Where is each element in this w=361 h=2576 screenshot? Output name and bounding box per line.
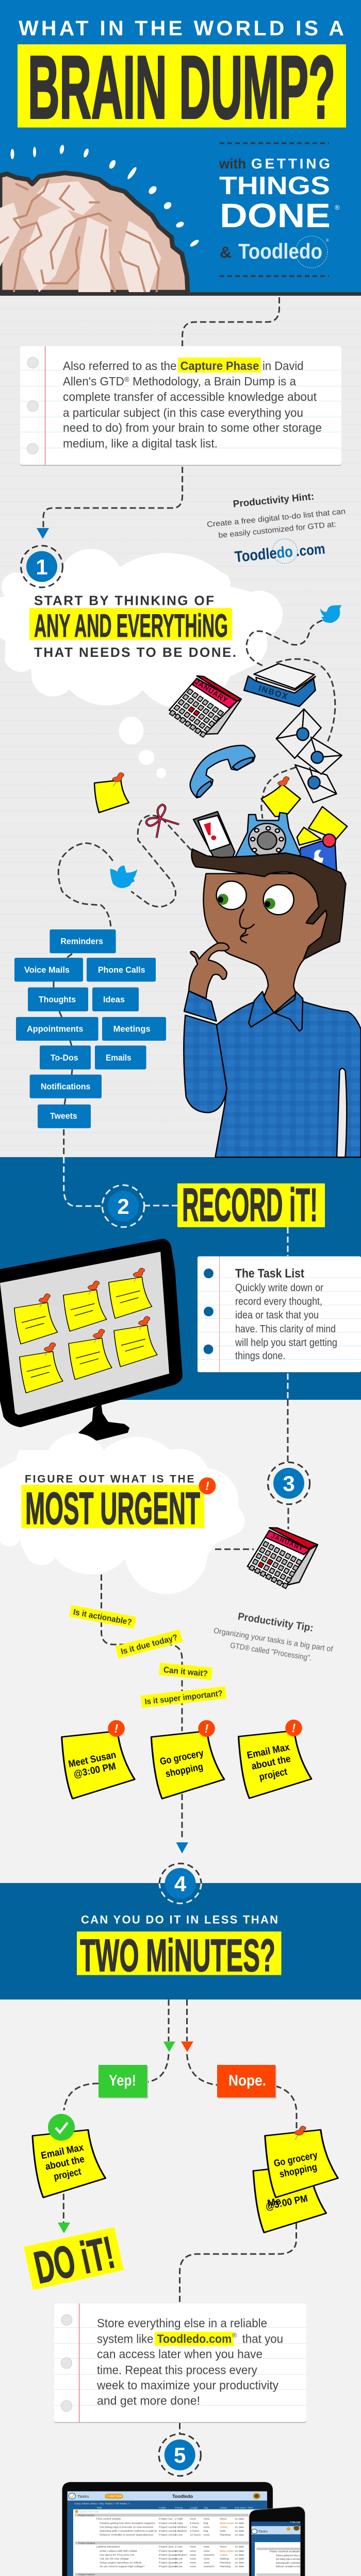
ruled paper section background — [0, 296, 361, 1157]
laptop task rows: no date — [235, 2518, 244, 2521]
laptop task rows: no date — [235, 2526, 244, 2529]
note text: meet susan: Meet Susan — [68, 1750, 117, 1770]
nose and mouth — [240, 909, 254, 943]
thought bubbles — [119, 717, 166, 778]
icon: calendar large — [168, 676, 241, 739]
laptop task rows: Get specs for XTQ-2321-HS — [100, 2554, 135, 2556]
logo lockup: with getting things done and toodledo: ® — [326, 238, 329, 243]
icon: brain — [0, 173, 188, 292]
sticky notes: stacked deferred tasks: Go grocery — [273, 2150, 319, 2170]
badge: step 1 — [21, 546, 63, 587]
store text: can access later when you have — [97, 2347, 262, 2361]
laptop task rows: Planning — [220, 2534, 231, 2537]
intro text: Methodology, a Brain Dump is a — [129, 375, 296, 388]
productivity hint: Create a free digital to-do list that can — [206, 507, 346, 529]
productivity tip: GTD® called "Processing". — [229, 1641, 313, 1663]
icon: green check — [48, 2114, 75, 2141]
intro text — [63, 359, 322, 450]
icon: twitter bird lower — [110, 866, 138, 888]
task list text: Quickly write down or — [235, 1282, 323, 1294]
laptop task rows: Waiting — [220, 2557, 229, 2561]
store text: time. Repeat this process every — [97, 2363, 257, 2377]
chip: notifications — [30, 1075, 102, 1098]
productivity tip — [213, 1611, 334, 1663]
laptop task rows: 0 Low — [175, 2546, 183, 2548]
badge: step 5: 5 — [174, 2443, 186, 2467]
laptop task rows: none — [190, 2550, 196, 2553]
laptop task rows: 2 hours — [190, 2530, 200, 2533]
text: small calendar month: JANUARY — [270, 1532, 304, 1552]
laptop task rows: Project Quasar — [159, 2557, 177, 2561]
laptop task rows: Hold — [220, 2530, 226, 2533]
note text: go grocery shopping: shopping — [165, 1761, 204, 1780]
chip: emails — [95, 1045, 146, 1070]
heading: step 1: START BY THINKING OF — [34, 592, 214, 608]
button: yep: Yep! — [109, 2072, 136, 2089]
badge: step 3: 3 — [283, 1471, 295, 1496]
note text: meet susan — [68, 1750, 117, 1780]
light section background — [0, 1400, 361, 2576]
laptop task rows: none — [204, 2562, 210, 2564]
laptop task rows: no date — [235, 2546, 244, 2548]
laptop task rows: 1 hour — [190, 2526, 198, 2529]
icon: ribbon — [146, 805, 179, 838]
badge: step 5 — [159, 2434, 201, 2476]
laptop task rows: Project Quasar — [78, 2542, 95, 2544]
laptop task rows: Selecting path A sometimes redirects to path B — [100, 2530, 157, 2533]
arrow: note to do it — [58, 2194, 70, 2233]
laptop task rows: 0 Low — [175, 2562, 183, 2564]
sticky notes: urgent tasks artwork — [62, 1731, 311, 1799]
chip: reminders — [50, 929, 116, 953]
sticky note: email max: Email Max — [40, 2142, 85, 2161]
laptop task rows: Refactor controller to remove dependencies — [100, 2534, 153, 2537]
laptop app header: Tag — [204, 2506, 208, 2509]
laptop task rows: none — [204, 2546, 210, 2548]
phone: Flow control module — [270, 2550, 300, 2553]
intro text: Allen's GTD — [63, 375, 126, 388]
chip: meetings: Meetings — [113, 1024, 151, 1034]
laptop app header: Folder — [159, 2506, 166, 2509]
laptop task rows: Packets getting lost when exception happens — [100, 2522, 155, 2525]
note text: email max — [246, 1742, 292, 1783]
logo: toodledo.com: Toodledo — [234, 543, 293, 566]
laptop task rows: no date — [235, 2534, 244, 2537]
illustration: things flying out of head — [58, 605, 361, 1157]
decision arrows — [64, 1999, 297, 2134]
chip: phone calls — [87, 958, 156, 981]
laptop task rows: bug — [204, 2522, 208, 2525]
laptop task rows: no date — [235, 2522, 244, 2525]
intro text: Also referred to as the — [63, 359, 176, 372]
arrow: cloud to calendar — [215, 1549, 254, 1550]
laptop task rows: Next Action — [220, 2522, 234, 2525]
text: inbox label: INBOX — [257, 684, 289, 701]
intro text: medium, like a digital task list. — [63, 437, 218, 450]
laptop app header: Length — [190, 2506, 198, 2509]
store text: that you — [242, 2332, 283, 2345]
laptop task rows: None — [220, 2518, 226, 2521]
logo: toodledo.com: .com — [295, 540, 326, 560]
icon: sticky note left — [94, 773, 129, 812]
laptop task rows: Project Nebula — [78, 2573, 95, 2575]
laptop task rows: none — [190, 2558, 196, 2561]
logo lockup: with getting things done and toodledo: ® — [335, 204, 340, 211]
icon: facebook card — [299, 834, 337, 872]
laptop task rows: 0 Low — [175, 2565, 183, 2568]
phone: Refactor controller to rem — [276, 2565, 300, 2568]
phone — [249, 2506, 341, 2576]
badge: step 2: 2 — [117, 1194, 129, 1218]
task list text: will help you start getting — [235, 1337, 337, 1349]
laptop task rows: no date — [235, 2557, 244, 2561]
cuff — [184, 991, 217, 1021]
laptop task rows: 2 High — [175, 2518, 183, 2521]
logo: toodledo.com — [234, 535, 326, 568]
laptop task rows: 0 Low — [175, 2534, 183, 2537]
store text: Toodledo.com — [157, 2332, 232, 2345]
task list text: have. This clarity of mind — [235, 1324, 336, 1335]
badge: step 1: 1 — [36, 555, 48, 579]
chip: ideas: Ideas — [103, 995, 125, 1005]
laptop app header: Gary Olsen (Me) > My Tasks > All Tasks > — [74, 2502, 130, 2505]
heading: two minutes — [77, 1913, 282, 1981]
phone: Packets getting lost when e — [276, 2554, 300, 2557]
logo lockup: with getting things done and toodledo: DONE — [220, 196, 331, 234]
laptop task rows: none — [204, 2550, 210, 2553]
torso — [215, 993, 361, 1157]
task list text: The Task List — [235, 1266, 304, 1280]
laptop app header: Status — [220, 2506, 227, 2509]
chip: thoughts: Thoughts — [39, 995, 76, 1005]
store text: and get more done! — [97, 2394, 200, 2407]
icon: exclamation — [199, 1478, 216, 1494]
laptop app header: + ADD TASK — [107, 2495, 122, 2498]
sticky notes: stacked deferred tasks — [253, 2126, 338, 2232]
laptop task rows: Project Aurora — [159, 2522, 176, 2525]
icon: brain rays — [10, 144, 200, 248]
productivity hint: be easily customized for GTD at: — [218, 520, 336, 540]
hair — [191, 849, 346, 959]
productivity tip: Organizing your tasks is a big part of — [213, 1626, 334, 1654]
chip: emails: Emails — [106, 1053, 132, 1062]
button: nope — [217, 2065, 276, 2098]
chip: voice mails — [14, 958, 83, 981]
text: calendar month: JANUARY — [193, 677, 229, 704]
panel: captured task chips — [14, 929, 166, 1128]
task list text: things done. — [235, 1350, 285, 1362]
arrow: cloud through questions to notes — [101, 1574, 188, 1854]
laptop task rows: none — [190, 2562, 196, 2564]
chip: to-dos: To-Dos — [51, 1053, 78, 1062]
icon: sticky notes right — [297, 807, 347, 845]
urgent badge marks: ! — [114, 1722, 119, 1735]
laptop task rows: 1 Medium — [175, 2526, 187, 2529]
heading: step 1 — [29, 592, 236, 660]
laptop task rows: Flow control module — [96, 2518, 121, 2521]
laptop task rows: Planning — [220, 2565, 231, 2568]
laptop app header: Due Date / Time — [235, 2506, 253, 2509]
laptop task rows: Project Aurora — [159, 2526, 176, 2529]
illustration: laptop and phone showing toodledo — [38, 2482, 341, 2576]
arrow head: no — [181, 2041, 193, 2052]
laptop task rows: none — [204, 2534, 210, 2537]
arrow: header to intro card — [183, 297, 280, 346]
phone: Get debug logs to truncate — [276, 2558, 300, 2561]
laptop task rows: bug — [204, 2530, 208, 2533]
icon: handset — [190, 745, 255, 798]
laptop task rows: Active — [220, 2554, 227, 2556]
collar — [249, 992, 303, 1031]
chip: meetings — [102, 1017, 166, 1041]
intro text: need to do) from your brain to some other storage — [63, 421, 322, 434]
laptop task rows: 1 Medium — [175, 2530, 187, 2533]
task list text: idea or task that you — [235, 1310, 319, 1321]
laptop task rows: none — [204, 2527, 210, 2529]
note text: go grocery shopping: Go grocery — [159, 1748, 205, 1768]
chip: notifications: Notifications — [41, 1081, 90, 1091]
phone: Tasks — [258, 2530, 268, 2533]
shirt gap — [337, 1069, 347, 1157]
urgent badge marks: ! — [205, 1722, 209, 1735]
badge: step 4 — [159, 1863, 201, 1903]
chip: tweets: Tweets — [50, 1111, 77, 1121]
chip: ideas — [92, 987, 139, 1011]
button: yep — [99, 2065, 148, 2098]
note text: email max: project — [258, 1767, 289, 1783]
laptop task rows: no date — [235, 2550, 244, 2553]
header background — [0, 0, 361, 292]
arrow head: yes — [163, 2041, 175, 2052]
laptop task rows: Order Arduino with WiFi shield — [100, 2550, 137, 2553]
laptop task rows: Project Aurora — [159, 2530, 176, 2533]
note text: email max: Email Max — [246, 1742, 291, 1761]
laptop task rows: Project Aurora — [159, 2534, 176, 2537]
laptop task rows: none — [190, 2546, 196, 2548]
laptop task rows: 2 High — [175, 2522, 183, 2525]
badge: step 4: 4 — [174, 1872, 187, 1896]
laptop task rows: None — [220, 2546, 226, 2548]
note text: email max: about the — [251, 1754, 292, 1772]
laptop task rows: no date — [235, 2562, 244, 2564]
panel: intro notebook card — [20, 346, 341, 466]
arrow: card to step 5 — [179, 2423, 180, 2434]
icon: rotary telephone — [235, 812, 301, 860]
laptop task rows: Planning — [220, 2562, 231, 2564]
intro text: a particular subject (in this case everything you — [63, 406, 303, 419]
chip: appointments — [16, 1017, 99, 1041]
band: two minutes section — [0, 1883, 361, 1999]
laptop task rows: Project Aur... — [159, 2518, 174, 2521]
productivity hint — [206, 492, 346, 568]
note text: meet susan: @3:00 PM — [73, 1761, 117, 1780]
laptop task rows: Project Quasar — [159, 2565, 177, 2568]
badge: step 3 — [268, 1462, 310, 1504]
icon: inbox tray — [244, 664, 316, 706]
intro text: complete transfer of accessible knowledge about — [63, 390, 317, 403]
laptop task rows: none — [204, 2518, 210, 2521]
task list text — [235, 1266, 337, 1362]
heading: most urgent: MOST URGENT — [25, 1483, 200, 1534]
laptop task rows: no date — [235, 2565, 244, 2568]
chip: appointments: Appointments — [27, 1024, 83, 1034]
urgent badge marks — [114, 1721, 296, 1735]
label: can it wait — [159, 1663, 212, 1680]
chip: to-dos — [40, 1045, 91, 1070]
laptop — [38, 2482, 273, 2576]
icon: exclamation: ! — [205, 1479, 209, 1493]
laptop task rows: research — [204, 2554, 215, 2556]
panel: the task list card — [198, 1256, 361, 1373]
heading: do it: DO iT! — [30, 2226, 119, 2293]
arrow: chips to step 2 — [64, 1129, 288, 1256]
laptop task rows: none — [190, 2554, 196, 2556]
logo lockup: with getting things done and toodledo: GETTING — [251, 156, 330, 172]
laptop app header: Quick Add Task — [79, 2511, 99, 2513]
laptop task rows: none — [190, 2518, 196, 2521]
label: is it super important: Is it super important? — [144, 1689, 223, 1706]
icon: cell phone — [193, 811, 235, 858]
laptop task rows: Project Aurora — [78, 2514, 94, 2516]
button: nope: Nope. — [228, 2072, 266, 2089]
laptop app header: Task — [96, 2506, 102, 2509]
face and neck — [204, 874, 336, 1013]
note text: go grocery shopping — [159, 1748, 205, 1780]
laptop task rows: Active — [220, 2526, 227, 2529]
heading: do it — [23, 2225, 125, 2295]
phone: Selecting path A sometime — [276, 2562, 300, 2565]
cloud: step 1 heading — [0, 549, 283, 708]
icon: twitter bird top — [320, 605, 341, 623]
laptop app header: Toodledo — [172, 2494, 193, 2499]
urgent badge marks: ! — [292, 1721, 296, 1735]
sticky notes: stacked deferred tasks: @3:00 PM — [265, 2193, 309, 2212]
laptop task rows: Do we need to support high voltage? — [100, 2565, 145, 2568]
laptop task rows: Lighting subsystem — [96, 2546, 120, 2548]
sticky notes: stacked deferred tasks: shopping — [278, 2162, 318, 2180]
eyes — [217, 881, 294, 914]
label: is it actionable: Is it actionable? — [73, 1608, 133, 1627]
sticky note: email max: about the — [44, 2154, 86, 2173]
laptop task rows: no date — [235, 2554, 244, 2556]
arrow: notes to store card — [179, 2223, 296, 2303]
dark band under header — [0, 292, 361, 296]
laptop task rows: 2 High — [175, 2550, 183, 2553]
laptop task rows: Ask Jim for max voltage — [100, 2557, 129, 2561]
store text — [96, 2316, 283, 2407]
heading: most urgent: FIGURE OUT WHAT IS THE — [25, 1473, 194, 1485]
logo lockup: with getting things done and toodledo — [219, 143, 340, 276]
logo lockup: with getting things done and toodledo: & — [220, 243, 232, 261]
label: can it wait: Can it wait? — [163, 1666, 208, 1679]
urgent badges — [108, 1720, 302, 1737]
person — [184, 849, 361, 1157]
logo lockup: with getting things done and toodledo: Toodledo — [238, 239, 322, 263]
icon: envelopes — [276, 709, 342, 803]
laptop task rows: research — [204, 2565, 215, 2568]
laptop app header: Priority — [175, 2506, 183, 2509]
intro text: in David — [262, 359, 303, 372]
chip: tweets — [38, 1105, 91, 1128]
sticky notes: stacked deferred tasks: Me — [267, 2196, 282, 2209]
icon: sticky note diamond — [261, 776, 301, 817]
arm sleeve — [184, 1015, 227, 1113]
icon: calendar small — [248, 1528, 318, 1590]
illustration: monitor with notes — [0, 1239, 183, 1440]
laptop task rows: Next Action — [220, 2550, 234, 2553]
laptop app header: Tasks — [77, 2494, 89, 2499]
laptop task rows: Project Qua... — [159, 2546, 176, 2548]
task list text: record every thought, — [235, 1296, 322, 1308]
heading: step 1: THAT NEEDS TO BE DONE. — [34, 645, 236, 660]
band: record section — [0, 1157, 361, 1400]
title line: WHAT IN THE WORLD IS A — [19, 16, 344, 40]
chip: reminders: Reminders — [60, 937, 103, 946]
store text: week to maximize your productivity — [96, 2379, 278, 2392]
laptop task rows: 1 Medium — [175, 2554, 187, 2556]
panel: store everything card — [54, 2303, 306, 2423]
laptop task rows: Setup project repository on Github — [100, 2562, 142, 2564]
heading: two minutes: CAN YOU DO IT IN LESS THAN — [81, 1913, 278, 1926]
phone: 7:59 AM — [290, 2521, 300, 2524]
laptop task rows: none — [204, 2558, 210, 2561]
store text: Store everything else in a reliable — [97, 2316, 267, 2330]
heading: most urgent — [22, 1473, 216, 1534]
connectors between task chips — [54, 954, 72, 1105]
hand — [189, 943, 229, 998]
sticky note: email max — [32, 2114, 105, 2197]
arrow: intro card to step 1 — [37, 467, 183, 539]
laptop task rows — [75, 2514, 249, 2576]
laptop task rows: 8 hours — [190, 2522, 200, 2525]
cloud: step 3 heading — [0, 1433, 245, 1594]
laptop task rows: Project Quasar — [159, 2550, 177, 2553]
logo lockup: with getting things done and toodledo: with — [219, 156, 246, 172]
laptop task rows: no date — [235, 2530, 244, 2533]
laptop task rows: Project Quasar — [159, 2562, 177, 2564]
laptop task rows: 0 Low — [175, 2557, 183, 2561]
laptop task rows: none — [190, 2566, 196, 2568]
chip: thoughts — [28, 987, 88, 1011]
laptop task rows: Get debug logs to truncate on new sessions — [100, 2526, 154, 2529]
store text: system like — [97, 2332, 153, 2345]
store text: ® — [232, 2331, 237, 2339]
laptop app header — [68, 2492, 267, 2576]
dashed flight paths — [58, 620, 335, 929]
laptop task rows: 16 hours — [190, 2534, 201, 2537]
chip: voice mails: Voice Mails — [24, 965, 70, 975]
logo lockup: with getting things done and toodledo: THINGS — [219, 172, 330, 200]
intro text: Capture Phase — [180, 359, 259, 372]
sticky note: email max: project — [53, 2166, 83, 2182]
chip: phone calls: Phone Calls — [98, 965, 145, 975]
label: is it due today: Is it due today? — [120, 1633, 178, 1656]
badge: step 2 — [102, 1185, 144, 1227]
intro text: ® — [124, 375, 129, 383]
productivity tip: Productivity Tip: — [237, 1611, 314, 1634]
productivity hint: Productivity Hint: — [233, 492, 315, 510]
laptop task rows: Project Quasar — [159, 2554, 177, 2556]
